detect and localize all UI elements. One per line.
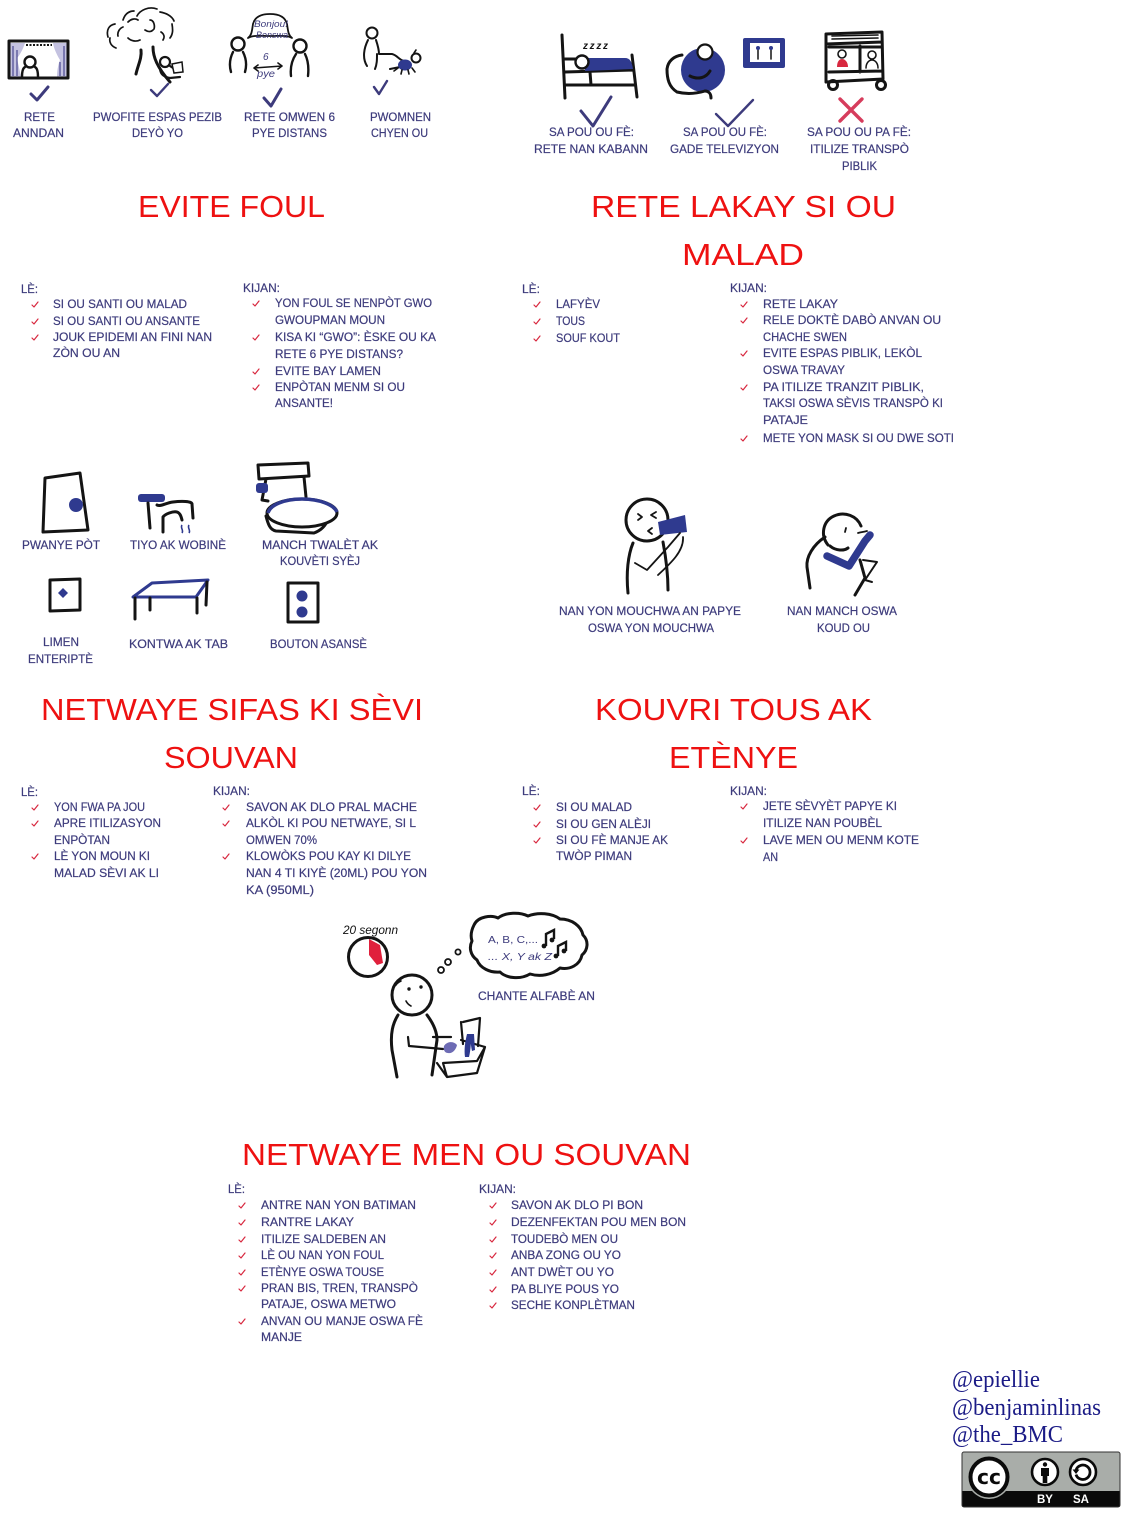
icon: check: [581, 97, 611, 126]
list: le: TWÒP PIMAN: [556, 850, 632, 863]
list: le: MALAD SÈVI AK LI: [54, 867, 159, 880]
caption: manch twalet ak kouveti syej: [262, 539, 378, 568]
heading: netwaye sifas ki sevi souvan: NETWAYE SIFAS KI SÈVI: [41, 692, 423, 727]
list: kijan: RETE 6 PYE DISTANS?: [275, 349, 403, 361]
caption: limen enteripte: LIMEN: [43, 637, 79, 649]
author handles: @benjaminlinas: [952, 1395, 1101, 1421]
list: kijan: SECHE KONPLÈTMAN: [511, 1299, 635, 1312]
list: kijan: KA (950ML): [246, 885, 314, 897]
icon: creative commons by-sa badge: cc: [977, 1465, 1001, 1489]
caption: rete nan kabann: [534, 126, 648, 156]
caption: manch twalet ak kouveti syej: KOUVÈTI SYÈJ: [280, 555, 360, 568]
icon: clock: [342, 925, 398, 976]
caption: rete anndan: RETE: [24, 112, 55, 124]
heading: rete lakay si ou malad: MALAD: [682, 237, 804, 272]
list: le: ETÈNYE OSWA TOUSE: [261, 1266, 384, 1279]
heading: rete lakay si ou malad: [591, 189, 896, 272]
list: kijan: KIJAN:: [730, 786, 767, 798]
list: kijan: SAVON AK DLO PI BON: [511, 1200, 643, 1212]
icon: clock: 20 segonn: [342, 925, 398, 937]
list: le: ANTRE NAN YON BATIMAN: [261, 1200, 416, 1212]
list: le: SI OU FÈ MANJE AK: [556, 834, 668, 847]
icon: check: [151, 84, 168, 96]
list: kijan: CHACHE SWEN: [763, 332, 847, 344]
list: le: ENPÒTAN: [54, 834, 110, 847]
icon: creative commons by-sa badge: SA: [1073, 1494, 1089, 1506]
icon: thought bubble: ... X, Y ak Z: [488, 951, 553, 963]
heading: netwaye sifas ki sevi souvan: [41, 692, 423, 775]
illustration: hand washing with clock and song: [342, 913, 595, 1077]
heading: kouvri tous ak etenye: ETÈNYE: [669, 740, 798, 775]
list: kijan: OMWEN 70%: [246, 835, 317, 847]
list: kijan: LAVE MEN OU MENM KOTE: [763, 835, 919, 847]
panel: evite foul: [9, 8, 436, 410]
panel: kouvri tous: [522, 499, 919, 864]
list: kijan: [730, 283, 954, 445]
caption: pwanye pot: PWANYE PÒT: [22, 539, 100, 552]
icon: elevator buttons: [288, 583, 318, 622]
icon: thought bubble: [438, 913, 587, 978]
list: le: LÈ:: [228, 1183, 245, 1196]
caption: gade televizyon: [670, 126, 779, 156]
icon: creative commons by-sa badge: [962, 1452, 1120, 1507]
caption: itilize transpo piblik: SA POU OU PA FÈ:: [807, 126, 911, 139]
list: kijan: [243, 283, 436, 410]
list: kijan: TAKSI OSWA SÈVIS TRANSPÒ KI: [763, 397, 943, 410]
list: le: SOUF KOUT: [556, 333, 620, 345]
list: le: SI OU SANTI OU ANSANTE: [53, 316, 200, 328]
list: kijan: ANBA ZONG OU YO: [511, 1250, 621, 1262]
icon: toilet: [256, 463, 337, 533]
list: le: YON FWA PA JOU: [54, 802, 145, 814]
caption: rete nan kabann: RETE NAN KABANN: [534, 144, 648, 156]
list: kijan: ANT DWÈT OU YO: [511, 1266, 614, 1279]
list: kijan: OSWA TRAVAY: [763, 365, 845, 377]
list: le: [21, 283, 212, 360]
list: le: LÈ YON MOUN KI: [54, 850, 150, 863]
caption: rete omwen 6 pye: PYE DISTANS: [252, 128, 327, 140]
list: kijan: KIJAN:: [243, 283, 280, 295]
list: le: SI OU MALAD: [556, 802, 632, 814]
list: kijan: KIJAN:: [479, 1184, 516, 1196]
list: le: RANTRE LAKAY: [261, 1217, 354, 1229]
list: le: ANVAN OU MANJE OSWA FÈ: [261, 1315, 423, 1328]
list: kijan: EVITE ESPAS PIBLIK, LEKÒL: [763, 347, 923, 360]
icon: door: [43, 473, 88, 532]
icon: two people six feet apart: Bonswa: [256, 30, 288, 40]
list: le: [522, 283, 620, 345]
list: kijan: KISA KI “GWO”: ÈSKE OU KA: [275, 331, 436, 344]
caption: chante alfabe an: CHANTE ALFABÈ AN: [478, 990, 595, 1003]
caption: pwofite espas: [93, 112, 222, 140]
list: le: SI OU SANTI OU MALAD: [53, 299, 187, 311]
caption: pwomnen chyen ou: CHYEN OU: [371, 128, 428, 140]
caption: pwofite espas: PWOFITE ESPAS PEZIB: [93, 112, 222, 124]
list: kijan: PA ITILIZE TRANZIT PIBLIK,: [763, 382, 924, 394]
icon: sneezing into tissue: [626, 499, 687, 593]
panel: netwaye men: [228, 913, 691, 1344]
caption: gade televizyon: GADE TELEVIZYON: [670, 144, 779, 156]
icon: check: [264, 89, 281, 106]
icon: person on couch watching tv: [667, 38, 785, 98]
caption: pwomnen chyen ou: PWOMNEN: [370, 112, 431, 124]
list: kijan: NAN 4 TI KIYÈ (20ML) POU YON: [246, 867, 427, 880]
list: le: ZÒN OU AN: [53, 347, 120, 360]
caption: nan yon mouchwa: [559, 606, 741, 635]
heading: evite foul: EVITE FOUL: [138, 189, 325, 224]
caption: limen enteripte: [28, 637, 93, 666]
caption: manch twalet ak kouveti syej: MANCH TWALÈT AK: [262, 539, 378, 552]
list: kijan: KLOWÒKS POU KAY KI DILYE: [246, 850, 411, 863]
caption: itilize transpo piblik: PIBLIK: [842, 161, 877, 173]
list: kijan: RELE DOKTÈ DABÒ ANVAN OU: [763, 314, 941, 327]
list: kijan: ALKÒL KI POU NETWAYE, SI L: [246, 817, 417, 830]
icon: light switch: [50, 579, 80, 611]
heading: netwaye men ou souvan: NETWAYE MEN OU SOUVAN: [242, 1137, 691, 1172]
list: le: MANJE: [261, 1332, 302, 1344]
caption: limen enteripte: ENTERIPTÈ: [28, 653, 93, 666]
icon: two people six feet apart: 6: [263, 52, 269, 63]
caption: nan yon mouchwa: OSWA YON MOUCHWA: [588, 623, 714, 635]
icon: thought bubble: A, B, C,...: [488, 934, 538, 946]
list: le: [228, 1183, 423, 1344]
icon: two people six feet apart: [230, 14, 308, 80]
list: le: JOUK EPIDEMI AN FINI NAN: [53, 332, 212, 344]
author handles: [952, 1367, 1101, 1448]
list: kijan: [213, 786, 427, 897]
heading: kouvri tous ak etenye: KOUVRI TOUS AK: [595, 692, 872, 727]
list: kijan: SAVON AK DLO PRAL MACHE: [246, 802, 417, 814]
caption: itilize transpo piblik: [807, 126, 911, 173]
icon: check: [31, 87, 48, 100]
list: le: APRE ITILIZASYON: [54, 818, 161, 830]
icon: bus: [826, 32, 886, 90]
list: le: [522, 785, 668, 863]
caption: pwofite espas: DEYÒ YO: [132, 127, 183, 140]
list: kijan: RETE LAKAY: [763, 299, 838, 311]
list: le: LÈ:: [522, 785, 540, 798]
icon: faucet: [138, 494, 193, 533]
list: le: PATAJE, OSWA METWO: [261, 1299, 396, 1311]
list: kijan: KIJAN:: [213, 786, 250, 798]
caption: rete anndan: ANNDAN: [13, 128, 64, 140]
panel: rete lakay: [522, 32, 954, 445]
list: le: ITILIZE SALDEBEN AN: [261, 1234, 386, 1246]
list: le: LAFYÈV: [556, 298, 600, 311]
list: kijan: AN: [763, 852, 778, 864]
author handles: @the_BMC: [952, 1422, 1063, 1448]
heading: netwaye sifas ki sevi souvan: SOUVAN: [164, 740, 298, 775]
list: kijan: [730, 786, 919, 864]
caption: kontwa ak tab: KONTWA AK TAB: [129, 639, 228, 651]
list: kijan: JETE SÈVYÈT PAPYE KI: [763, 800, 897, 813]
list: kijan: ANSANTE!: [275, 398, 333, 410]
panel: netwaye sifas: [21, 463, 427, 897]
list: kijan: TOUDEBÒ MEN OU: [511, 1233, 618, 1246]
icon: bed: [562, 35, 637, 98]
list: le: PRAN BIS, TREN, TRANSPÒ: [261, 1282, 418, 1295]
caption: gade televizyon: SA POU OU FÈ:: [683, 126, 767, 139]
icon: check: [374, 81, 387, 94]
list: le: LÈ:: [21, 786, 38, 799]
list: le: LÈ:: [21, 283, 38, 296]
list: kijan: YON FOUL SE NENPÒT GWO: [275, 297, 432, 310]
caption: nan yon mouchwa: NAN YON MOUCHWA AN PAPYE: [559, 606, 741, 618]
icon: bed: zzzz: [582, 41, 608, 52]
caption: rete anndan: [13, 112, 64, 140]
icon: two people six feet apart: Bonjou!: [254, 19, 289, 29]
caption: rete omwen 6 pye: [244, 112, 335, 140]
icon: person washing hands: [391, 975, 485, 1077]
icon: sneezing into elbow: [807, 514, 877, 595]
list: kijan: KIJAN:: [730, 283, 767, 295]
list: le: TOUS: [556, 316, 585, 328]
list: kijan: ITILIZE NAN POUBÈL: [763, 817, 883, 830]
list: le: SI OU GEN ALÈJI: [556, 818, 651, 831]
icon: table: [133, 580, 208, 619]
list: le: LÈ OU NAN YON FOUL: [261, 1249, 385, 1262]
list: kijan: DEZENFEKTAN POU MEN BON: [511, 1217, 686, 1229]
icon: check: [716, 100, 753, 126]
heading: kouvri tous ak etenye: [595, 692, 872, 775]
icon: tree with reader: [107, 8, 183, 82]
caption: nan manch oswa koud ou: NAN MANCH OSWA: [787, 606, 897, 618]
icon: creative commons by-sa badge: BY: [1037, 1494, 1053, 1506]
caption: bouton asanse: BOUTON ASANSÈ: [270, 638, 367, 651]
icon: two people six feet apart: pye: [256, 69, 275, 80]
caption: rete nan kabann: SA POU OU FÈ:: [549, 126, 634, 139]
caption: pwomnen chyen ou: [370, 112, 431, 140]
heading: rete lakay si ou malad: RETE LAKAY SI OU: [591, 189, 896, 224]
author handles: @epiellie: [952, 1367, 1040, 1393]
icon: window: [9, 41, 68, 78]
credits: [952, 1367, 1120, 1507]
caption: rete omwen 6 pye: RETE OMWEN 6: [244, 112, 335, 124]
caption: tiyo ak wobine: TIYO AK WOBINÈ: [130, 539, 226, 552]
list: le: LÈ:: [522, 283, 540, 296]
list: kijan: METE YON MASK SI OU DWE SOTI: [763, 433, 954, 445]
icon: person walking dog: [364, 28, 420, 74]
icon: cross: [840, 99, 862, 121]
list: kijan: ENPÒTAN MENM SI OU: [275, 381, 405, 394]
list: le: [21, 786, 161, 880]
list: kijan: EVITE BAY LAMEN: [275, 366, 381, 378]
list: kijan: [479, 1184, 686, 1312]
list: kijan: PATAJE: [763, 415, 808, 427]
caption: itilize transpo piblik: ITILIZE TRANSPÒ: [810, 143, 909, 156]
list: kijan: GWOUPMAN MOUN: [275, 315, 385, 327]
caption: nan manch oswa koud ou: KOUD OU: [817, 623, 870, 635]
caption: nan manch oswa koud ou: [787, 606, 897, 635]
list: kijan: PA BLIYE POUS YO: [511, 1284, 619, 1296]
